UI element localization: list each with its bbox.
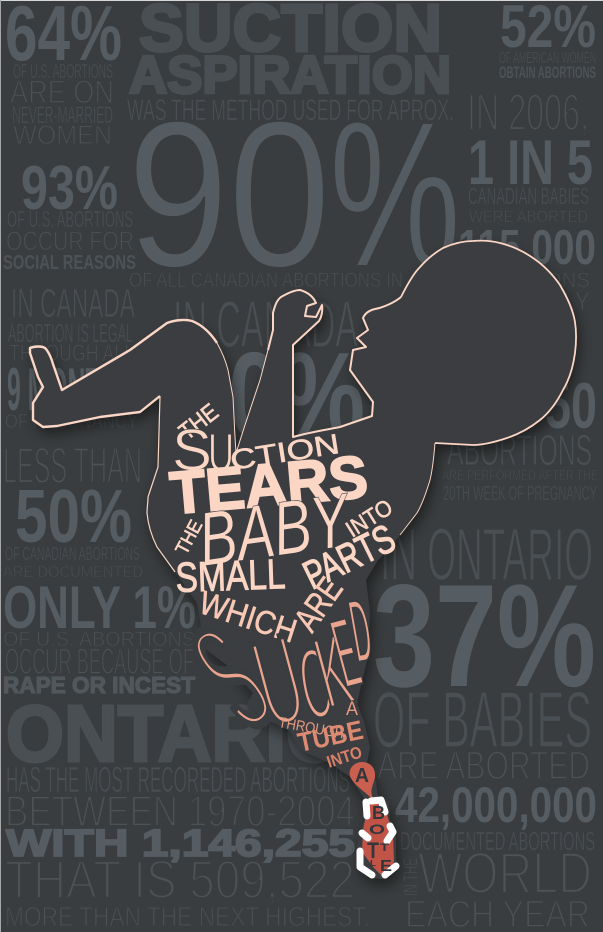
silhouette fill with shadow xyxy=(30,241,576,879)
text: LESS THAN xyxy=(3,437,142,494)
letter C: C xyxy=(291,627,339,742)
baby silhouette xyxy=(30,241,576,879)
stat: 52% of American women xyxy=(499,0,596,82)
stat: only 1% rape or incest xyxy=(3,574,196,698)
nib teardrop xyxy=(350,762,375,798)
line: rape or incest: RAPE OR INCEST xyxy=(3,672,195,698)
outline: inner knee thin xyxy=(217,343,268,453)
word: the: THE xyxy=(174,399,224,446)
line: of Canadian abortions: OF CANADIAN ABORTIONS xyxy=(5,544,140,564)
text: 9 MONTHS xyxy=(7,356,135,423)
heading aspiration: ASPIRATION xyxy=(129,46,451,105)
bottle letters xyxy=(367,803,392,875)
line: that is 509,522: THAT IS 509,522 xyxy=(5,850,355,910)
figure only 1%: ONLY 1% xyxy=(3,574,196,641)
outline: foot and leg xyxy=(30,320,217,427)
letter L: L xyxy=(370,859,376,868)
digit 0: 0 xyxy=(228,79,331,311)
rotated line: in the: IN THE xyxy=(401,858,422,896)
letters ction: CTION xyxy=(228,428,342,476)
bottle white outline left xyxy=(360,802,372,875)
outline: fist and arm xyxy=(268,290,401,437)
line: of U.S. abortions: OF U.S. ABORTIONS xyxy=(7,206,133,232)
giant figure 90% xyxy=(127,79,461,311)
stat: in Canada 90% behind figure xyxy=(173,287,365,463)
icon: bottle lettering xyxy=(360,797,396,878)
word: parts: PARTS xyxy=(297,516,402,598)
big letter U: U xyxy=(208,423,234,483)
letter a as tube nib xyxy=(350,762,375,798)
word: the (second): THE xyxy=(172,517,207,558)
letter E: E xyxy=(322,598,370,709)
line: of U.S. abortions: OF U.S. ABORTIONS xyxy=(13,61,113,83)
digit 9: 9 xyxy=(127,79,229,311)
nib letter: A xyxy=(355,765,369,787)
figure 93%: 93% xyxy=(21,154,118,223)
line: are on: ARE ON xyxy=(10,74,114,110)
text: OCCUR BECAUSE OF xyxy=(5,641,194,682)
line: through all: THROUGH ALL xyxy=(9,340,134,367)
word: small: SMALL xyxy=(175,550,286,601)
bottle white outline right xyxy=(371,800,396,875)
percent sign: % xyxy=(329,79,461,311)
word: a: A xyxy=(346,699,358,720)
line: of pregnancy: OF PREGNANCY xyxy=(5,411,138,433)
line: more than the next highest: MORE THAN THE NEXT HIGHEST. xyxy=(5,901,370,932)
figure 50%: 50% xyxy=(15,474,132,558)
line: annually: ANNUALLY xyxy=(470,286,590,316)
word: sucked xyxy=(166,580,378,761)
stat: abortions after the 20th week xyxy=(442,369,598,505)
stat: 64% never-married xyxy=(5,0,122,150)
big letter S: S xyxy=(172,418,212,483)
line: abortions: ABORTIONS xyxy=(470,269,590,292)
word: through: THROUGH xyxy=(277,714,345,742)
stat: 1 in 5 Canadian babies xyxy=(467,84,593,226)
letter B: B xyxy=(372,803,385,823)
stat: Canada legal through 9 months xyxy=(5,280,138,433)
outline: belly thin xyxy=(400,443,435,535)
word: into: INTO xyxy=(341,494,397,542)
line: in Canada: IN CANADA xyxy=(173,287,358,361)
line: social reasons: SOCIAL REASONS xyxy=(3,252,136,274)
stat: Ontario most recorded xyxy=(5,689,370,932)
word: baby: BABY xyxy=(194,477,358,583)
letter D: D xyxy=(343,580,378,681)
letter K: K xyxy=(304,612,363,730)
stat: Ontario 37% of babies xyxy=(373,513,596,788)
stat: less than 50% documented xyxy=(3,437,143,581)
outline: head xyxy=(401,241,576,445)
hand-lettered sentence inside the body xyxy=(166,399,402,798)
letter T second: T xyxy=(380,842,389,854)
line: of all Canadian abortions: OF ALL CANADIAN ABORTIONS IN xyxy=(129,269,403,292)
letter U: U xyxy=(240,608,318,755)
line: are documented: ARE DOCUMENTED xyxy=(3,564,143,581)
figure 90%: 90% xyxy=(175,327,365,463)
line: women: WOMEN xyxy=(13,120,112,150)
stat: 115,000 abortions xyxy=(458,221,596,316)
line: between 1970-2004: BETWEEN 1970-2004 xyxy=(5,787,355,836)
line: occur for: OCCUR FOR xyxy=(6,226,134,256)
line: in Canada: IN CANADA xyxy=(11,280,135,326)
word: tube: TUBE xyxy=(295,715,366,758)
letter S: S xyxy=(166,595,298,761)
word: which: WHICH xyxy=(195,583,301,650)
stat: 93% social reasons xyxy=(3,154,136,274)
line: never-married: NEVER-MARRIED xyxy=(12,102,113,129)
word: suction xyxy=(172,418,342,483)
stat: Canada legal through 9 months: ABORTION IS LEGAL xyxy=(8,318,133,348)
letter E: E xyxy=(380,858,392,875)
figure with 1,146,255: WITH 1,146,255 xyxy=(6,823,355,865)
stat: 42,000,000 worldwide xyxy=(395,777,597,932)
letter O: O xyxy=(369,821,385,837)
word: into (second): INTO xyxy=(324,743,364,772)
line: were aborted: WERE ABORTED xyxy=(469,207,588,226)
bottle red body xyxy=(362,797,394,878)
stat: suction aspiration 90% xyxy=(127,0,461,311)
word: tears: TEARS xyxy=(167,443,370,527)
outline: back thin xyxy=(147,396,175,572)
line: of U.S. abortions: OF U.S. ABORTIONS xyxy=(3,628,195,651)
letter T: T xyxy=(367,838,379,863)
heading Ontario: ONTARIO xyxy=(6,689,344,778)
word: are: ARE xyxy=(287,570,351,639)
